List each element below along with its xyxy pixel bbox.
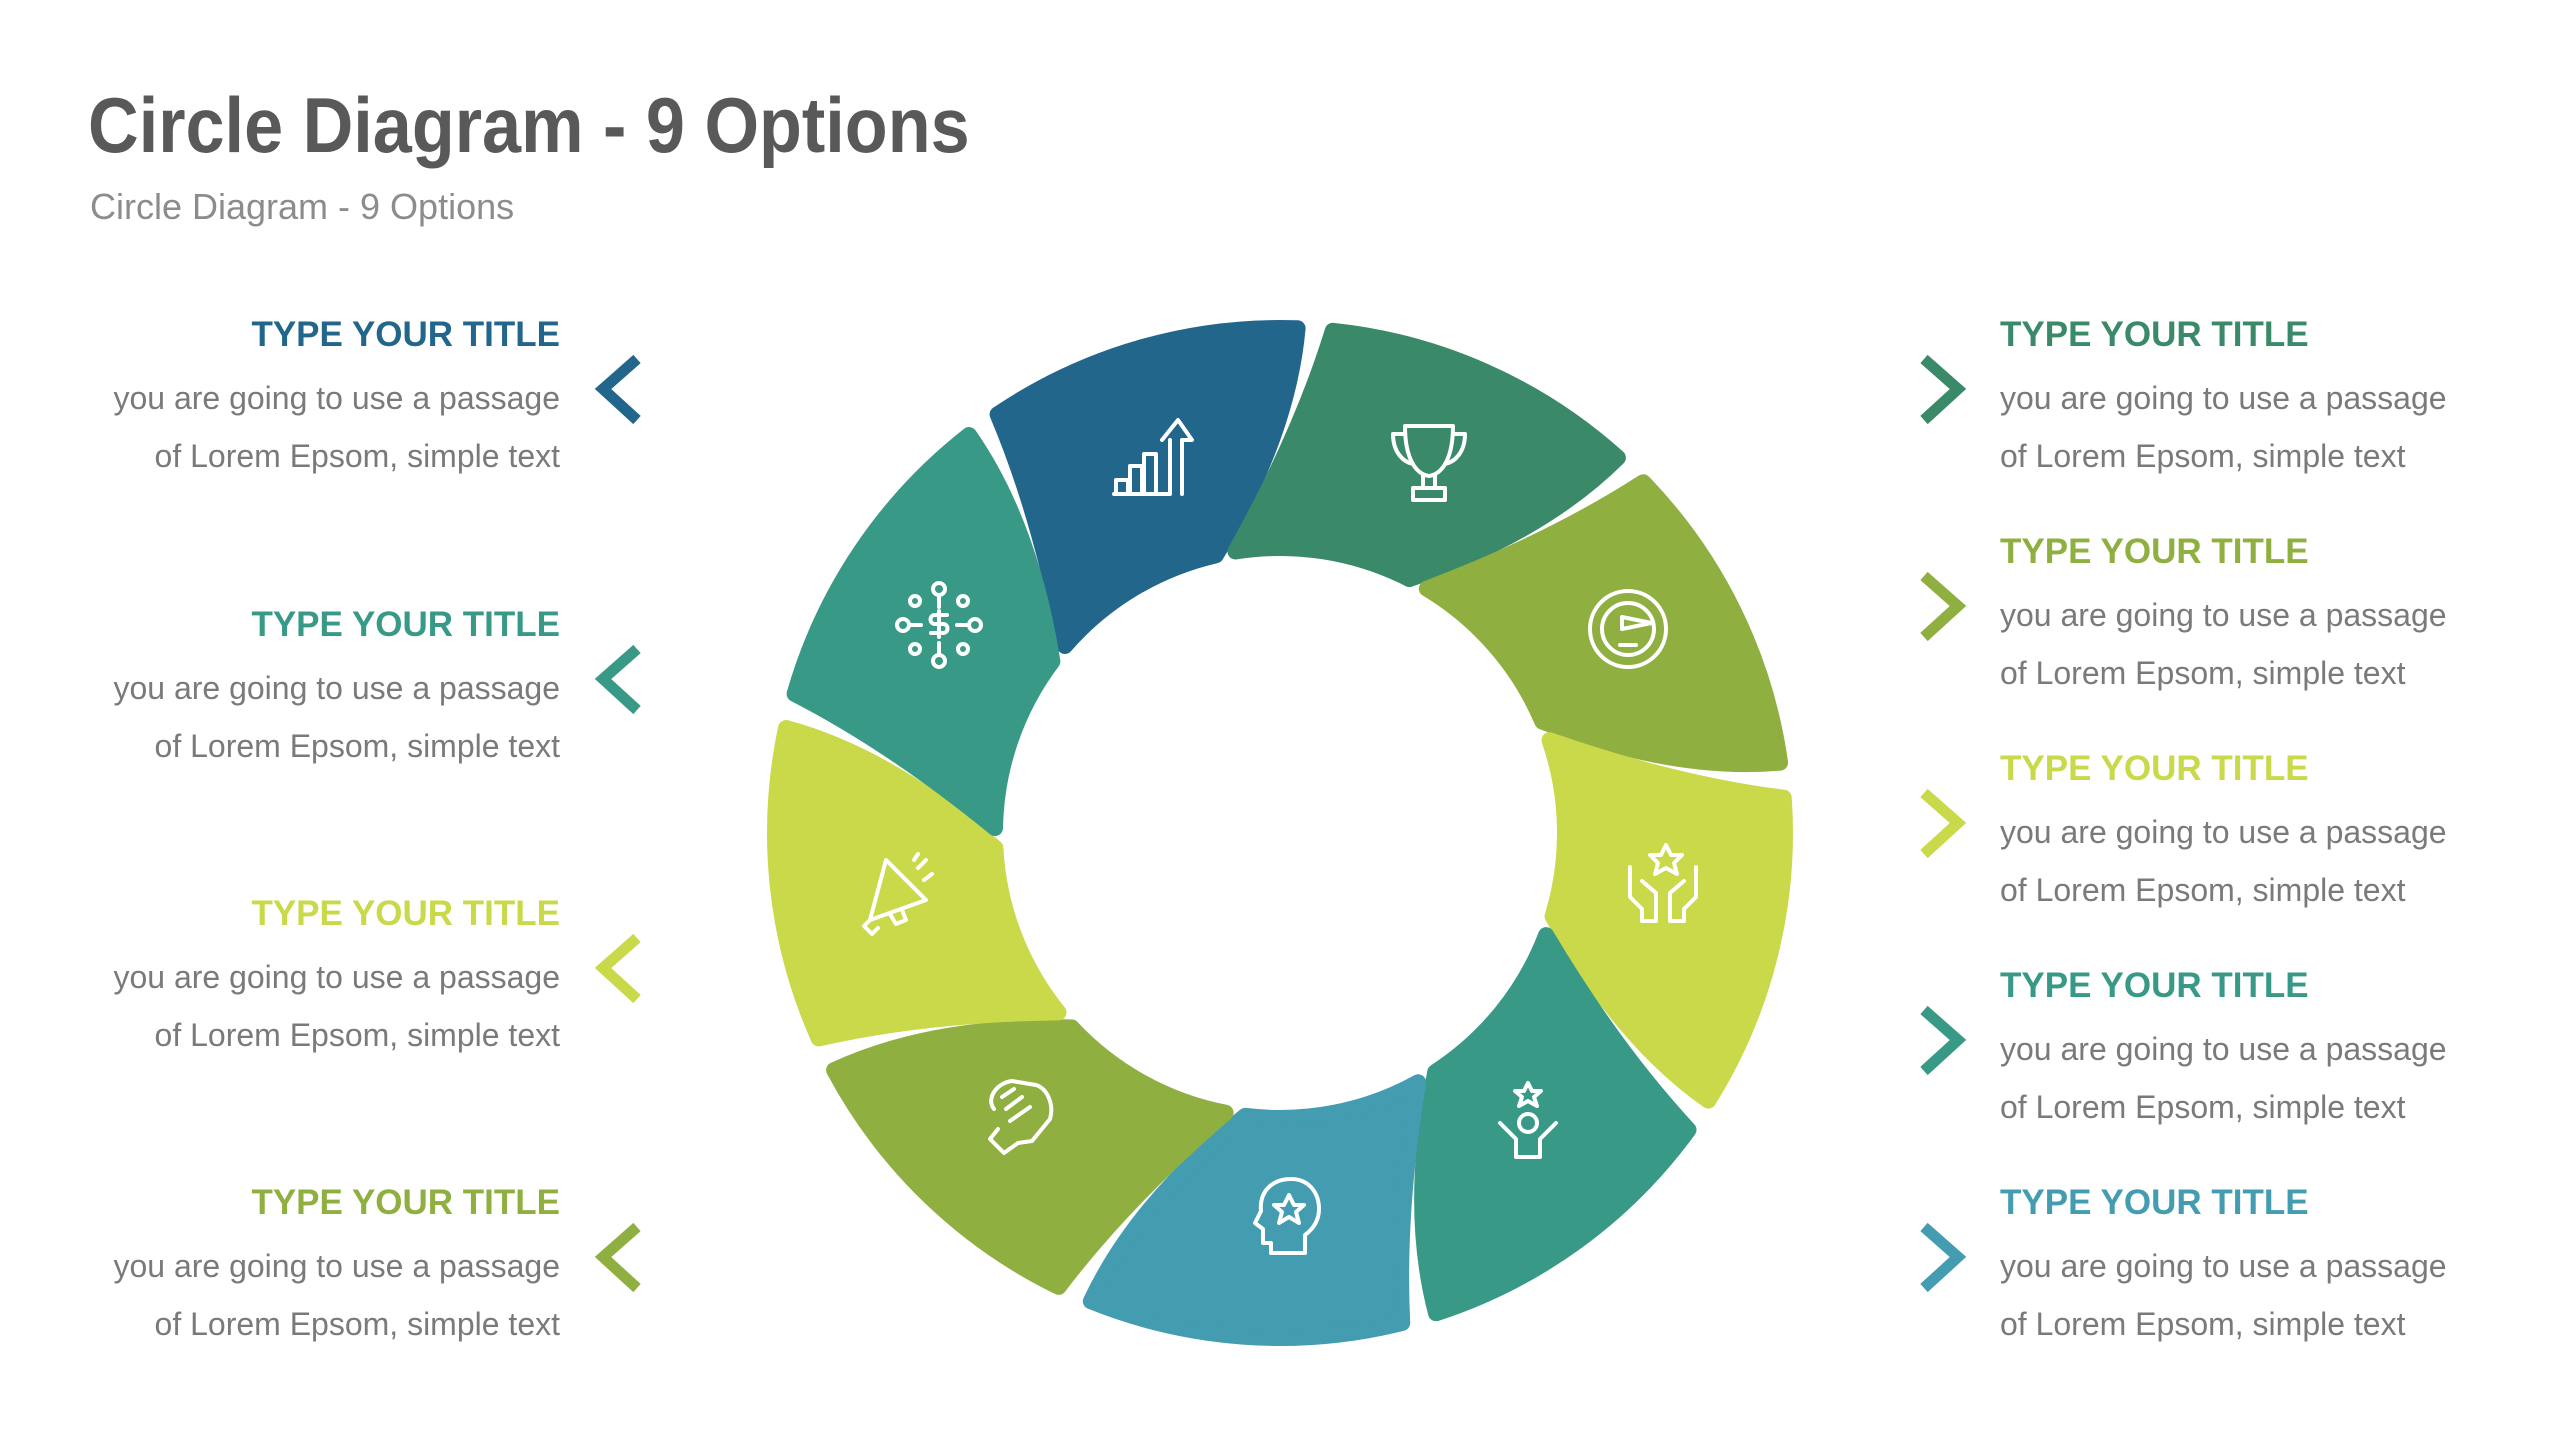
left text 3: TYPE YOUR TITLE — [251, 894, 560, 933]
icon: megaphone — [864, 854, 932, 934]
right text 3: of Lorem Epsom, simple text — [2000, 872, 2405, 908]
right text 1: TYPE YOUR TITLE — [2000, 315, 2309, 354]
right text 3: TYPE YOUR TITLE — [2000, 749, 2309, 788]
icon: trophy — [1393, 426, 1465, 500]
right text 5: TYPE YOUR TITLE — [2000, 1183, 2309, 1222]
left text 1: you are going to use a passage — [113, 380, 560, 416]
left text 3 — [113, 894, 560, 1053]
chevrons right — [1924, 359, 1958, 1288]
left text 2: of Lorem Epsom, simple text — [155, 728, 560, 764]
icon: person with star — [1500, 1083, 1556, 1157]
left text 2 — [113, 605, 560, 764]
icon: handshake — [990, 1081, 1051, 1153]
ring segments — [734, 265, 1859, 1404]
right text 4: of Lorem Epsom, simple text — [2000, 1089, 2405, 1125]
icon: money network — [897, 583, 981, 667]
left text 1 — [113, 315, 560, 474]
icon: speedometer — [1590, 591, 1666, 667]
right text 5 — [2000, 1183, 2447, 1342]
right text 1: you are going to use a passage — [2000, 380, 2447, 416]
right text 2: TYPE YOUR TITLE — [2000, 532, 2309, 571]
right text 4 — [2000, 966, 2447, 1125]
right text 3: you are going to use a passage — [2000, 814, 2447, 850]
right text 2 — [2000, 532, 2447, 691]
right text 3 — [2000, 749, 2447, 908]
icons — [864, 420, 1696, 1253]
right text 5: you are going to use a passage — [2000, 1248, 2447, 1284]
left text 2: TYPE YOUR TITLE — [251, 605, 560, 644]
left text 4: of Lorem Epsom, simple text — [155, 1306, 560, 1342]
icon: hands with star — [1630, 845, 1696, 921]
right text 4: you are going to use a passage — [2000, 1031, 2447, 1067]
icon: growth chart — [1114, 420, 1192, 494]
right text 5: of Lorem Epsom, simple text — [2000, 1306, 2405, 1342]
left text 1: TYPE YOUR TITLE — [251, 315, 560, 354]
left text 3: you are going to use a passage — [113, 959, 560, 995]
left text 1: of Lorem Epsom, simple text — [155, 438, 560, 474]
left text 4: TYPE YOUR TITLE — [251, 1183, 560, 1222]
right text 1 — [2000, 315, 2447, 474]
right text 1: of Lorem Epsom, simple text — [2000, 438, 2405, 474]
left text 4 — [113, 1183, 560, 1342]
chevrons left — [603, 359, 637, 1288]
left text 3: of Lorem Epsom, simple text — [155, 1017, 560, 1053]
title: Circle Diagram - 9 Options — [88, 81, 970, 169]
right text 4: TYPE YOUR TITLE — [2000, 966, 2309, 1005]
right text 2: of Lorem Epsom, simple text — [2000, 655, 2405, 691]
right text 2: you are going to use a passage — [2000, 597, 2447, 633]
icon: head with star — [1255, 1179, 1319, 1253]
subtitle: Circle Diagram - 9 Options — [90, 186, 514, 227]
left text 2: you are going to use a passage — [113, 670, 560, 706]
left text 4: you are going to use a passage — [113, 1248, 560, 1284]
